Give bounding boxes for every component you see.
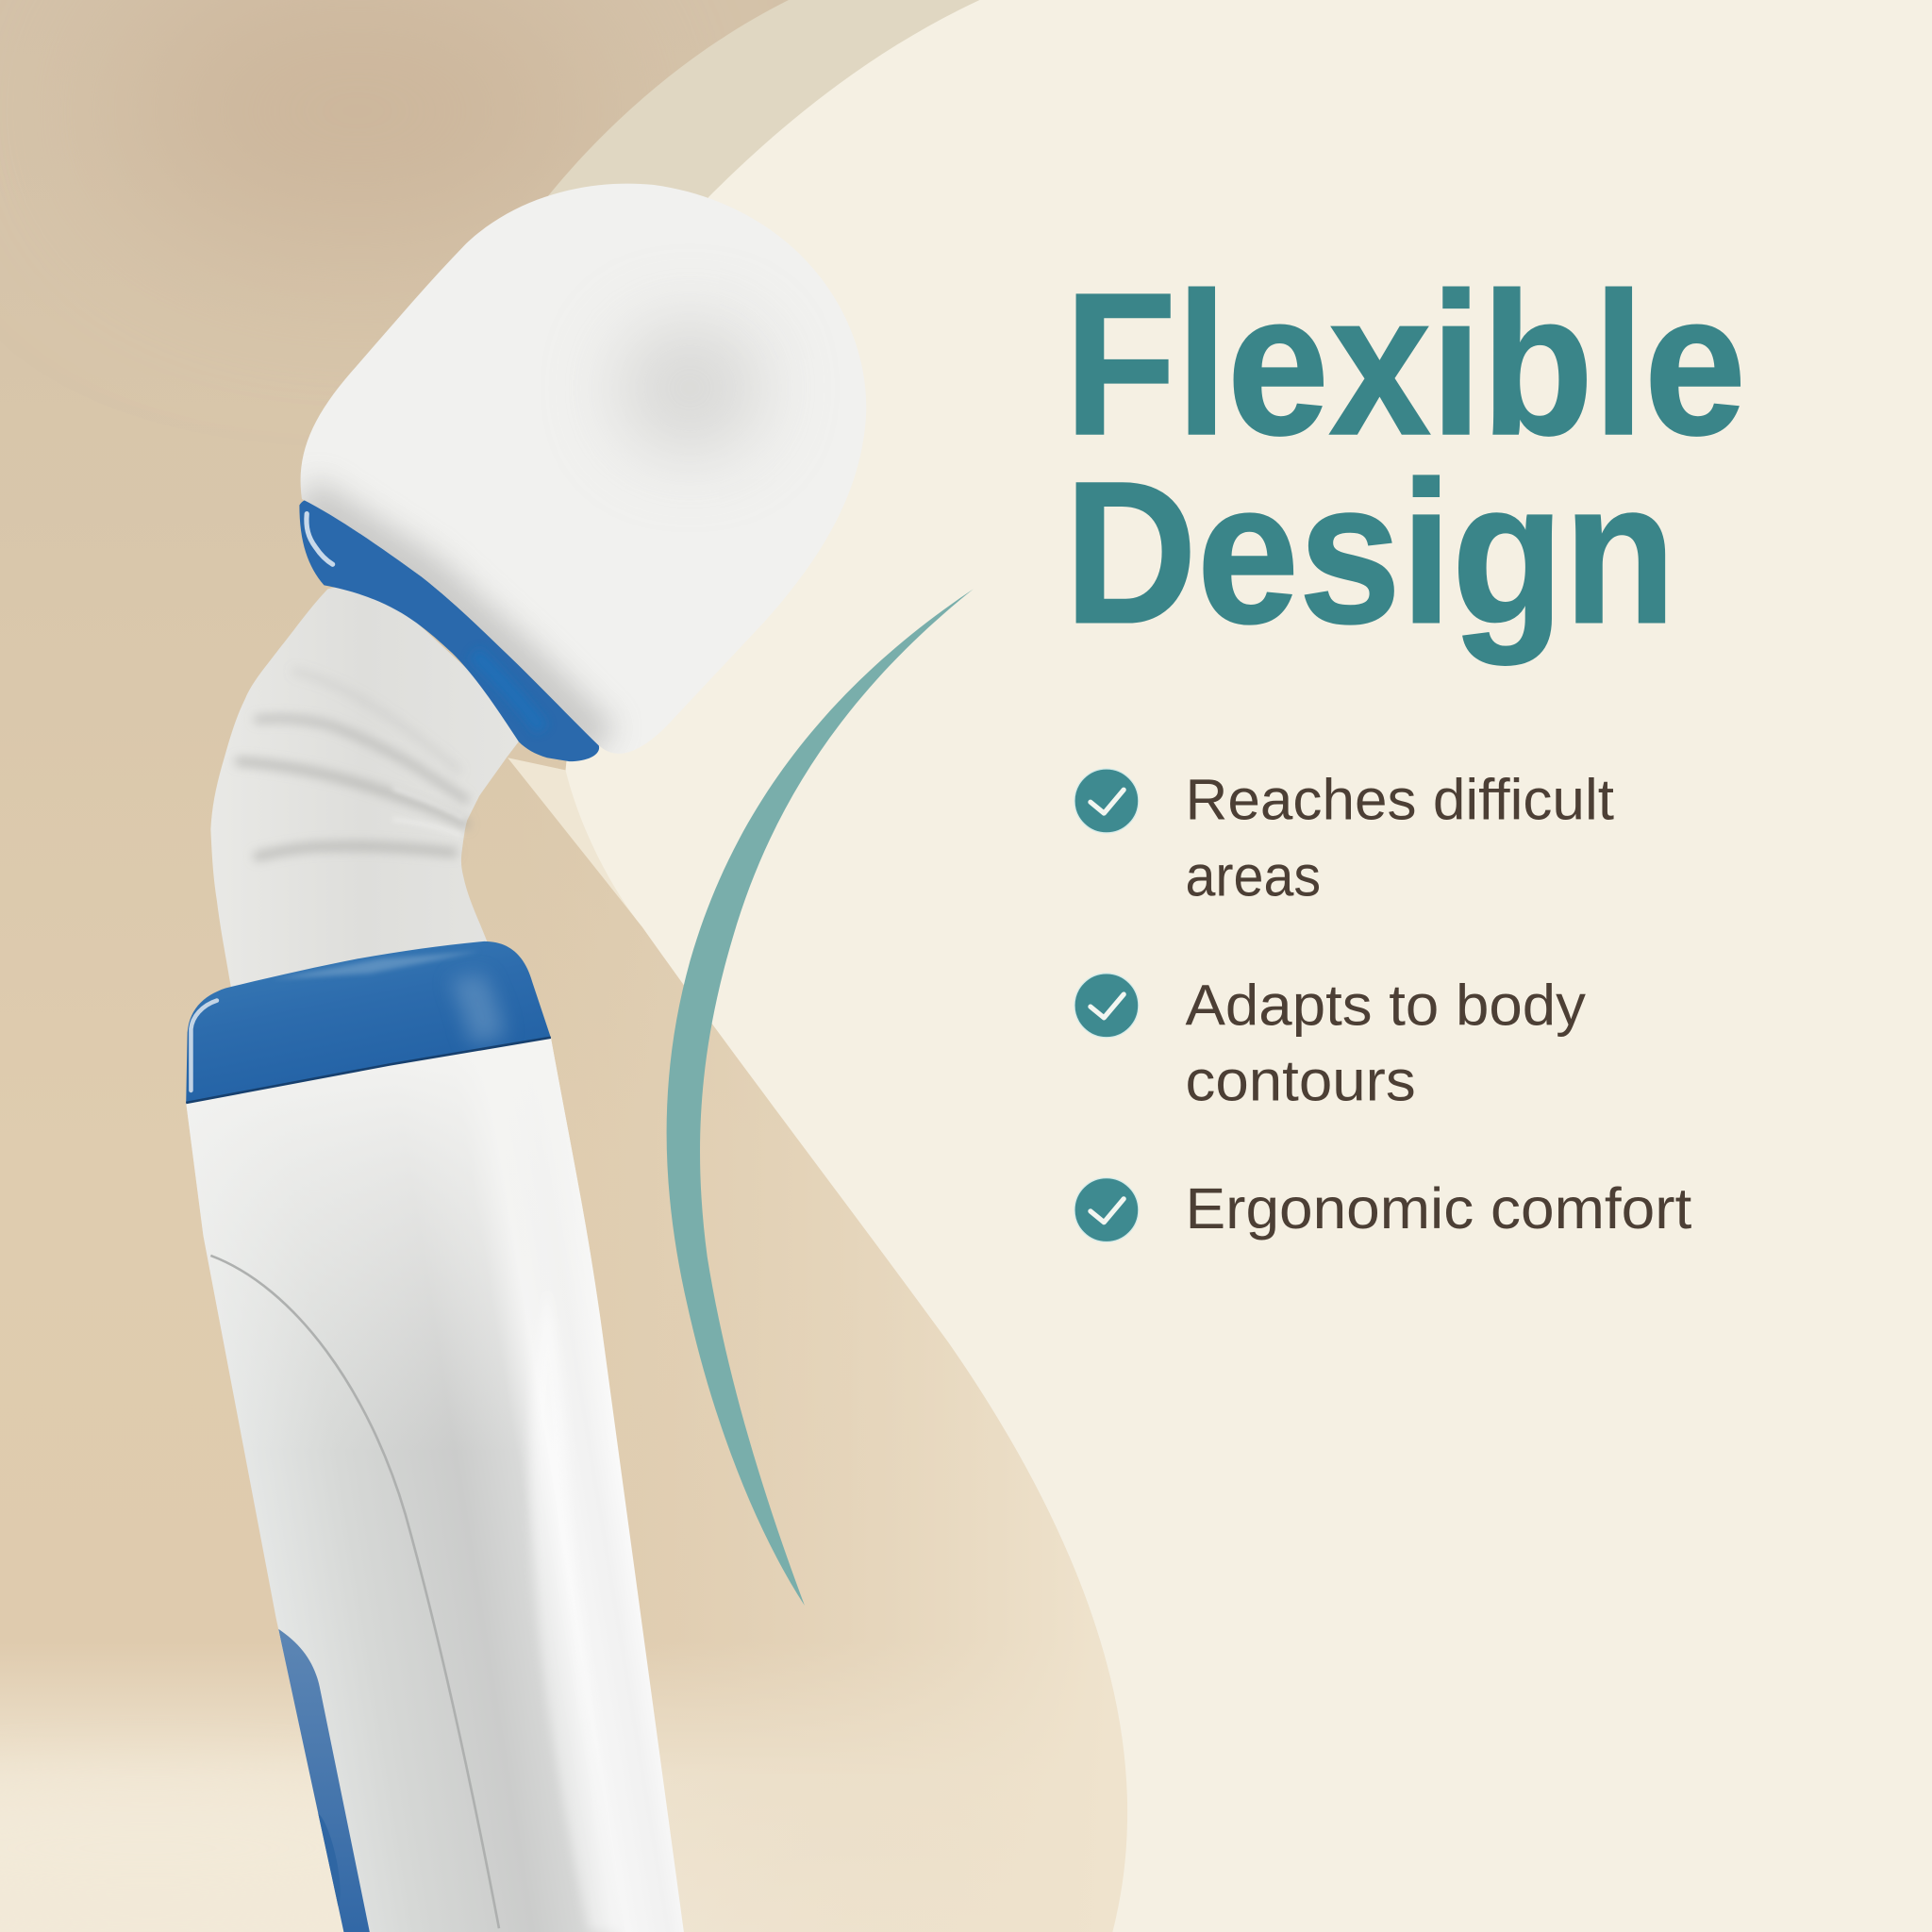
icon: check circle	[1074, 1178, 1139, 1242]
body handle	[173, 1035, 702, 1932]
title: Design	[1064, 441, 1675, 666]
background curve: light tan band	[542, 0, 986, 370]
background curve: soft highlight wedge	[508, 758, 641, 926]
flexible neck	[210, 579, 530, 1004]
blue ring under head	[299, 499, 599, 761]
feature: reaches difficult areas	[1074, 768, 1614, 909]
product: flexible massager	[173, 184, 866, 1932]
feature: adapts to body contours	[1074, 974, 1586, 1113]
feature text: Reaches difficult	[1185, 768, 1614, 833]
silicone head	[301, 184, 866, 754]
feature text: areas	[1185, 844, 1321, 909]
neck folds	[239, 672, 466, 857]
feature list	[1074, 768, 1691, 1242]
title	[1064, 252, 1746, 666]
teal swoosh arc	[667, 589, 974, 1606]
icon: check circle	[1074, 974, 1139, 1038]
title: Flexible	[1064, 252, 1746, 477]
feature text: Adapts to body	[1185, 974, 1586, 1039]
feature text: contours	[1185, 1048, 1416, 1113]
blue control button panel	[278, 1629, 370, 1932]
icon: check circle	[1074, 769, 1139, 833]
feature text: Ergonomic comfort	[1185, 1176, 1691, 1241]
feature: ergonomic comfort	[1074, 1176, 1691, 1242]
background curve: pale beige layer	[508, 758, 1127, 1932]
collar	[186, 941, 551, 1103]
background curve: cream panel	[566, 0, 1932, 1932]
